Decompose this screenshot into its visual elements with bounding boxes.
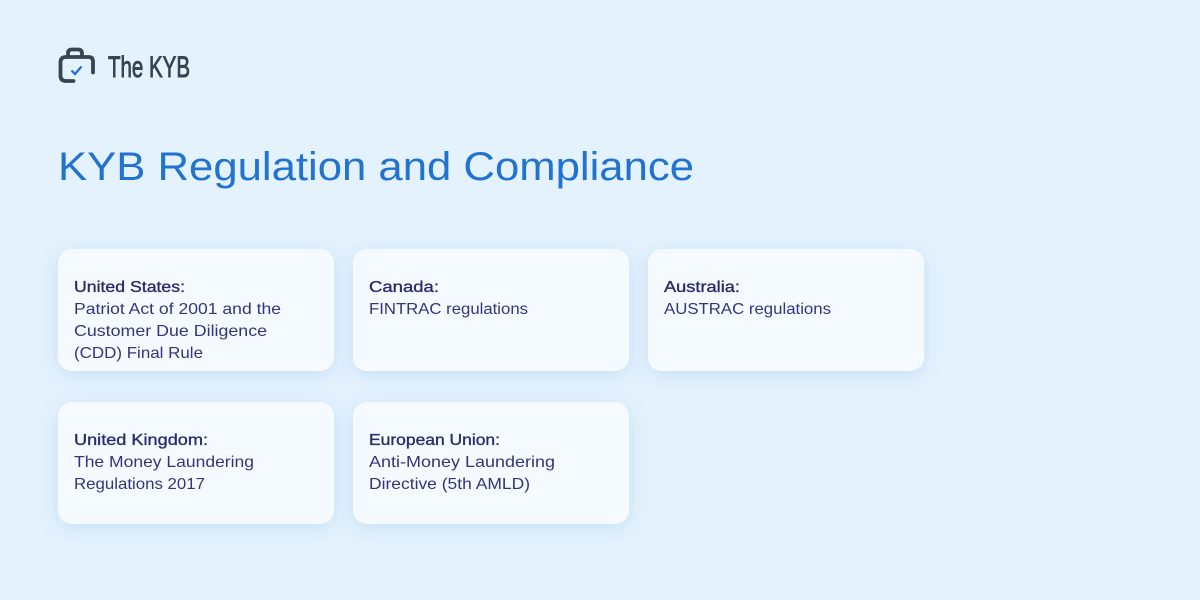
panel: United States: Customer Due Diligence [74,323,267,340]
panel: United Kingdom: The Money Laundering [74,454,254,471]
panel: Australia [648,249,924,371]
panel: United Kingdom: Regulations 2017 [74,476,205,493]
icon: briefcase with check [60,50,93,81]
panel: Canada [353,249,629,371]
logo [60,50,190,84]
panel: Canada: FINTRAC regulations [369,301,528,318]
panel: European Union: Directive (5th AMLD) [369,476,530,493]
panel: United States: Patriot Act of 2001 and the [74,301,281,318]
panel: European Union: European Union: [369,432,500,449]
panel: Australia: AUSTRAC regulations [664,301,831,318]
panel: United States: United States: [74,279,185,296]
title: KYB Regulation and Compliance [58,145,694,189]
panel: European Union: Anti-Money Laundering [369,454,555,471]
panel: United States: (CDD) Final Rule [74,345,203,362]
panel: European Union [353,402,629,524]
logo wordmark: The KYB [108,51,190,84]
panel: Australia: Australia: [664,279,740,296]
panel: United Kingdom: United Kingdom: [74,432,208,449]
panel: Canada: Canada: [369,279,439,296]
panel: United Kingdom [58,402,334,524]
panel: United States [58,249,334,371]
